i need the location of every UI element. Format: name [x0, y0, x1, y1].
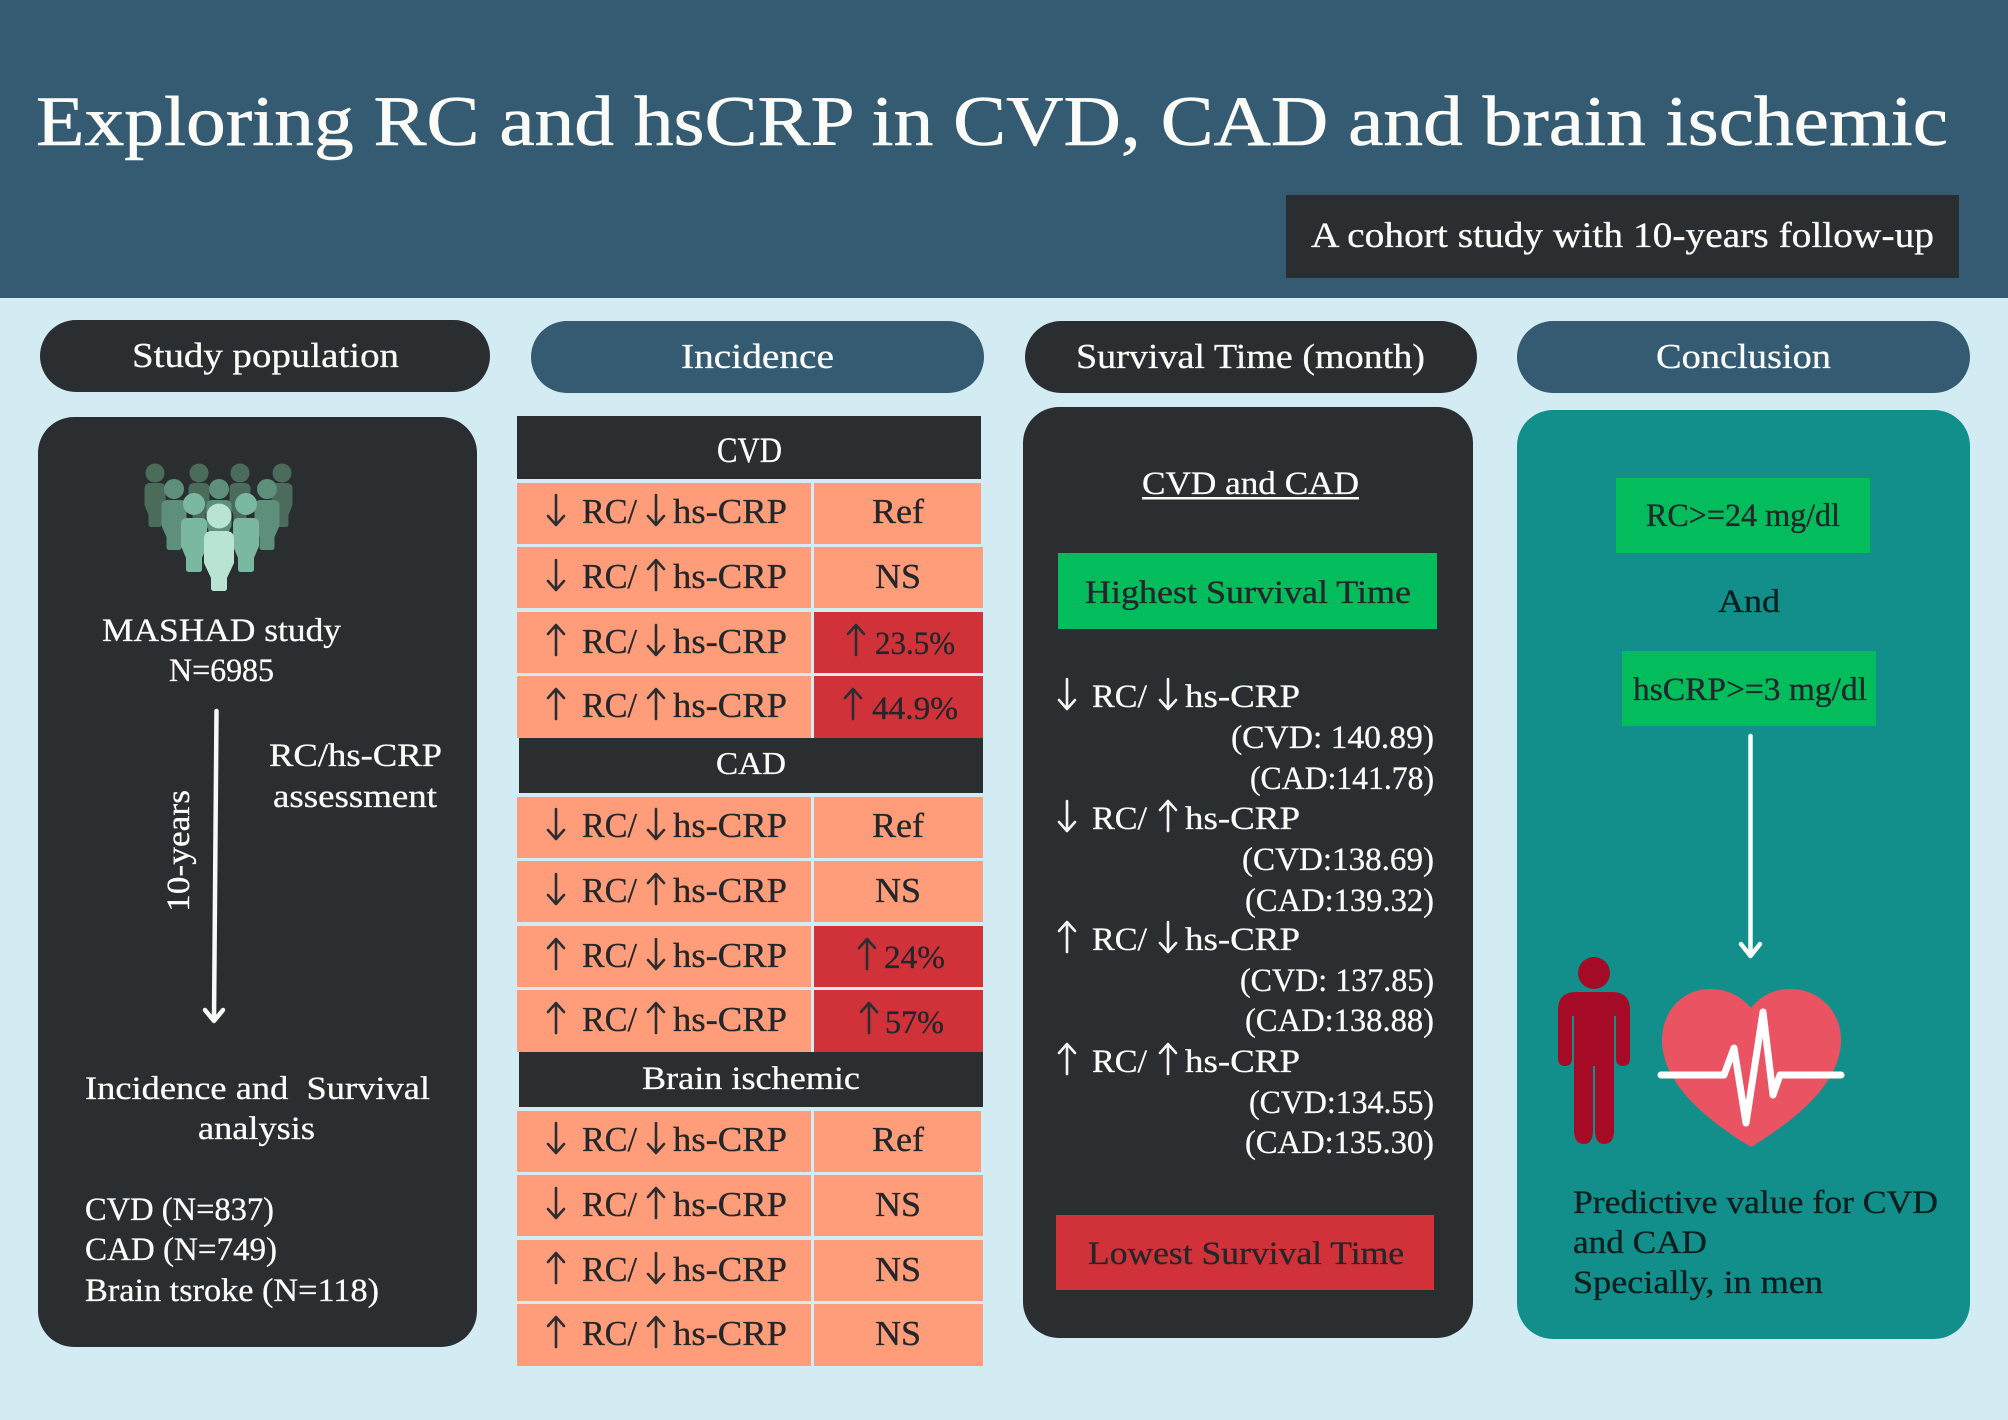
heading: survival time: Survival Time (month) — [1076, 337, 1425, 376]
label: highest survival time: Highest Survival Time — [1085, 575, 1411, 611]
text: incidence and survival analysis — [85, 1071, 430, 1147]
row: high RC low hs-CRP, CVD: hs-CRP — [673, 622, 787, 661]
row: high RC low hs-CRP, brain — [517, 1240, 983, 1301]
heading: survival time — [1025, 321, 1477, 393]
row: high RC high hs-CRP, brain: NS — [875, 1314, 921, 1353]
group: low RC high hs-CRP survival: RC/ — [1092, 801, 1148, 837]
row: low RC low hs-CRP, CVD: RC/ — [582, 492, 637, 531]
group: high RC low hs-CRP survival — [1059, 922, 1434, 1039]
threshold: hsCRP: hsCRP>=3 mg/dl — [1633, 672, 1867, 708]
group: high RC high hs-CRP survival: (CVD:134.55) — [1249, 1085, 1434, 1121]
group: high RC low hs-CRP survival: hs-CRP — [1185, 922, 1300, 958]
label: lowest survival time: Lowest Survival Time — [1088, 1236, 1404, 1272]
group: high RC high hs-CRP survival: hs-CRP — [1185, 1044, 1300, 1080]
row: low RC high hs-CRP, CAD: NS — [875, 871, 921, 910]
group: high RC low hs-CRP survival: (CVD: 137.85) — [1240, 963, 1434, 999]
text: predictive value — [1573, 1185, 1938, 1301]
panel: conclusion — [1517, 410, 1970, 1339]
row: low RC low hs-CRP, brain: Ref — [872, 1120, 924, 1159]
row: low RC high hs-CRP, CAD: hs-CRP — [673, 871, 787, 910]
row: low RC high hs-CRP, brain — [517, 1175, 983, 1236]
icon: heart with ECG line — [1661, 989, 1841, 1147]
group: low RC high hs-CRP survival: (CVD:138.69) — [1242, 842, 1434, 878]
row: high RC low hs-CRP, CVD — [517, 612, 983, 673]
row: high RC high hs-CRP, CVD: 44.9% — [872, 691, 958, 727]
row: low RC low hs-CRP, CVD: hs-CRP — [673, 492, 787, 531]
row: low RC low hs-CRP, brain: hs-CRP — [673, 1120, 787, 1159]
arrow: to conclusion — [1741, 736, 1760, 956]
row: low RC high hs-CRP, CVD: hs-CRP — [673, 557, 787, 596]
text: predictive value: Specially, in men — [1573, 1265, 1823, 1301]
row: low RC low hs-CRP, CVD — [517, 483, 981, 544]
heading: conclusion — [1517, 321, 1970, 393]
group: high RC low hs-CRP survival: RC/ — [1092, 922, 1148, 958]
row: high RC low hs-CRP, CAD: 24% — [884, 940, 945, 976]
text: outcome counts: Brain tsroke (N=118) — [85, 1273, 379, 1309]
text: RC/hs-CRP assessment: RC/hs-CRP — [269, 738, 442, 774]
row: high RC low hs-CRP, CAD — [517, 926, 983, 987]
text: outcome counts — [85, 1192, 379, 1309]
row: high RC low hs-CRP, CVD: 23.5% — [875, 626, 955, 662]
group: low RC high hs-CRP survival: hs-CRP — [1185, 801, 1300, 837]
text: predictive value: Predictive value for CVD — [1573, 1185, 1938, 1221]
row: low RC high hs-CRP, CVD: RC/ — [582, 557, 637, 596]
row: low RC low hs-CRP, brain: RC/ — [582, 1120, 637, 1159]
icon: man — [1558, 957, 1630, 1144]
group: low RC high hs-CRP survival — [1059, 801, 1434, 919]
row: high RC high hs-CRP, CVD: RC/ — [582, 686, 637, 725]
text: incidence and survival analysis: analysis — [198, 1111, 315, 1147]
heading: incidence: Incidence — [681, 337, 834, 376]
group: low RC low hs-CRP survival — [1059, 679, 1434, 797]
row: high RC high hs-CRP, brain — [517, 1304, 983, 1366]
text: predictive value: and CAD — [1573, 1225, 1707, 1261]
text: MASHAD study: N=6985 — [169, 653, 274, 689]
section header: CVD — [517, 416, 981, 479]
header band — [0, 0, 2008, 298]
section header: CAD: CAD — [716, 745, 786, 781]
section header: brain ischemic: Brain ischemic — [642, 1061, 860, 1097]
row: high RC high hs-CRP, brain: RC/ — [582, 1314, 637, 1353]
row: low RC high hs-CRP, CVD — [517, 547, 983, 608]
panel: incidence table — [517, 416, 983, 1366]
title: Exploring RC and hsCRP in CVD, CAD and brain ischemic — [36, 83, 1948, 161]
row: low RC low hs-CRP, CAD: hs-CRP — [673, 806, 787, 845]
row: high RC low hs-CRP, brain: RC/ — [582, 1250, 637, 1289]
text: RC/hs-CRP assessment: assessment — [273, 779, 437, 815]
row: low RC high hs-CRP, brain: NS — [875, 1185, 921, 1224]
threshold: hsCRP — [1622, 651, 1876, 726]
text: 10-years: 10-years — [161, 790, 197, 912]
row: low RC high hs-CRP, CAD: RC/ — [582, 871, 637, 910]
row: low RC high hs-CRP, brain: RC/ — [582, 1185, 637, 1224]
group: low RC low hs-CRP survival: (CAD:141.78) — [1250, 761, 1434, 797]
text: MASHAD study: MASHAD study — [102, 613, 342, 649]
heading: study population — [40, 320, 490, 392]
heading: conclusion: Conclusion — [1656, 337, 1831, 376]
text: MASHAD study — [102, 613, 342, 689]
text: RC/hs-CRP assessment — [269, 738, 442, 815]
row: low RC low hs-CRP, CAD: Ref — [872, 806, 924, 845]
row: high RC high hs-CRP, CAD: 57% — [885, 1005, 944, 1041]
panel: study population — [38, 417, 477, 1347]
row: low RC high hs-CRP, CVD: NS — [875, 557, 921, 596]
section header: CAD — [519, 738, 983, 793]
row: high RC high hs-CRP, brain: hs-CRP — [673, 1314, 787, 1353]
group: high RC high hs-CRP survival: (CAD:135.30) — [1245, 1125, 1434, 1161]
row: high RC high hs-CRP, CAD: RC/ — [582, 1000, 637, 1039]
text: outcome counts: CVD (N=837) — [85, 1192, 274, 1228]
subtitle box — [1286, 195, 1959, 278]
group: low RC low hs-CRP survival: RC/ — [1092, 679, 1148, 715]
icon: group of people — [144, 464, 292, 591]
row: high RC high hs-CRP, CVD — [517, 676, 983, 738]
group: high RC high hs-CRP survival — [1059, 1044, 1434, 1161]
heading: incidence — [531, 321, 984, 393]
row: low RC low hs-CRP, CVD: Ref — [872, 492, 924, 531]
group: low RC low hs-CRP survival: (CVD: 140.89) — [1231, 720, 1434, 756]
row: high RC high hs-CRP, CAD — [517, 990, 983, 1052]
text: incidence and survival analysis: Incidence and Survival — [85, 1071, 430, 1107]
row: low RC low hs-CRP, CAD: RC/ — [582, 806, 637, 845]
threshold: RC — [1616, 478, 1870, 553]
subtitle box: A cohort study with 10-years follow-up — [1311, 215, 1934, 255]
row: low RC high hs-CRP, CAD — [517, 861, 983, 922]
row: high RC high hs-CRP, CVD: hs-CRP — [673, 686, 787, 725]
arrow: follow-up — [205, 711, 223, 1021]
subheading: CVD and CAD: CVD and CAD — [1142, 466, 1359, 502]
section header: CVD: CVD — [717, 430, 782, 470]
row: high RC low hs-CRP, brain: hs-CRP — [673, 1250, 787, 1289]
row: high RC low hs-CRP, CAD: hs-CRP — [673, 936, 787, 975]
section header: brain ischemic — [519, 1052, 983, 1107]
panel: survival time — [1023, 407, 1473, 1338]
row: low RC high hs-CRP, brain: hs-CRP — [673, 1185, 787, 1224]
row: high RC low hs-CRP, brain: NS — [875, 1250, 921, 1289]
group: low RC low hs-CRP survival: hs-CRP — [1185, 679, 1300, 715]
group: high RC low hs-CRP survival: (CAD:138.88) — [1245, 1003, 1434, 1039]
row: high RC high hs-CRP, CAD: hs-CRP — [673, 1000, 787, 1039]
row: high RC low hs-CRP, CAD: RC/ — [582, 936, 637, 975]
threshold: RC: RC>=24 mg/dl — [1646, 498, 1840, 534]
heading: study population: Study population — [132, 336, 399, 375]
group: high RC high hs-CRP survival: RC/ — [1092, 1044, 1148, 1080]
label: lowest survival time — [1056, 1215, 1434, 1290]
text: outcome counts: CAD (N=749) — [85, 1232, 277, 1268]
text: And: And — [1718, 584, 1781, 620]
group: low RC high hs-CRP survival: (CAD:139.32) — [1245, 883, 1434, 919]
row: low RC low hs-CRP, brain — [517, 1111, 981, 1172]
row: low RC low hs-CRP, CAD — [517, 797, 983, 858]
label: highest survival time — [1058, 553, 1437, 629]
row: high RC low hs-CRP, CVD: RC/ — [582, 622, 637, 661]
